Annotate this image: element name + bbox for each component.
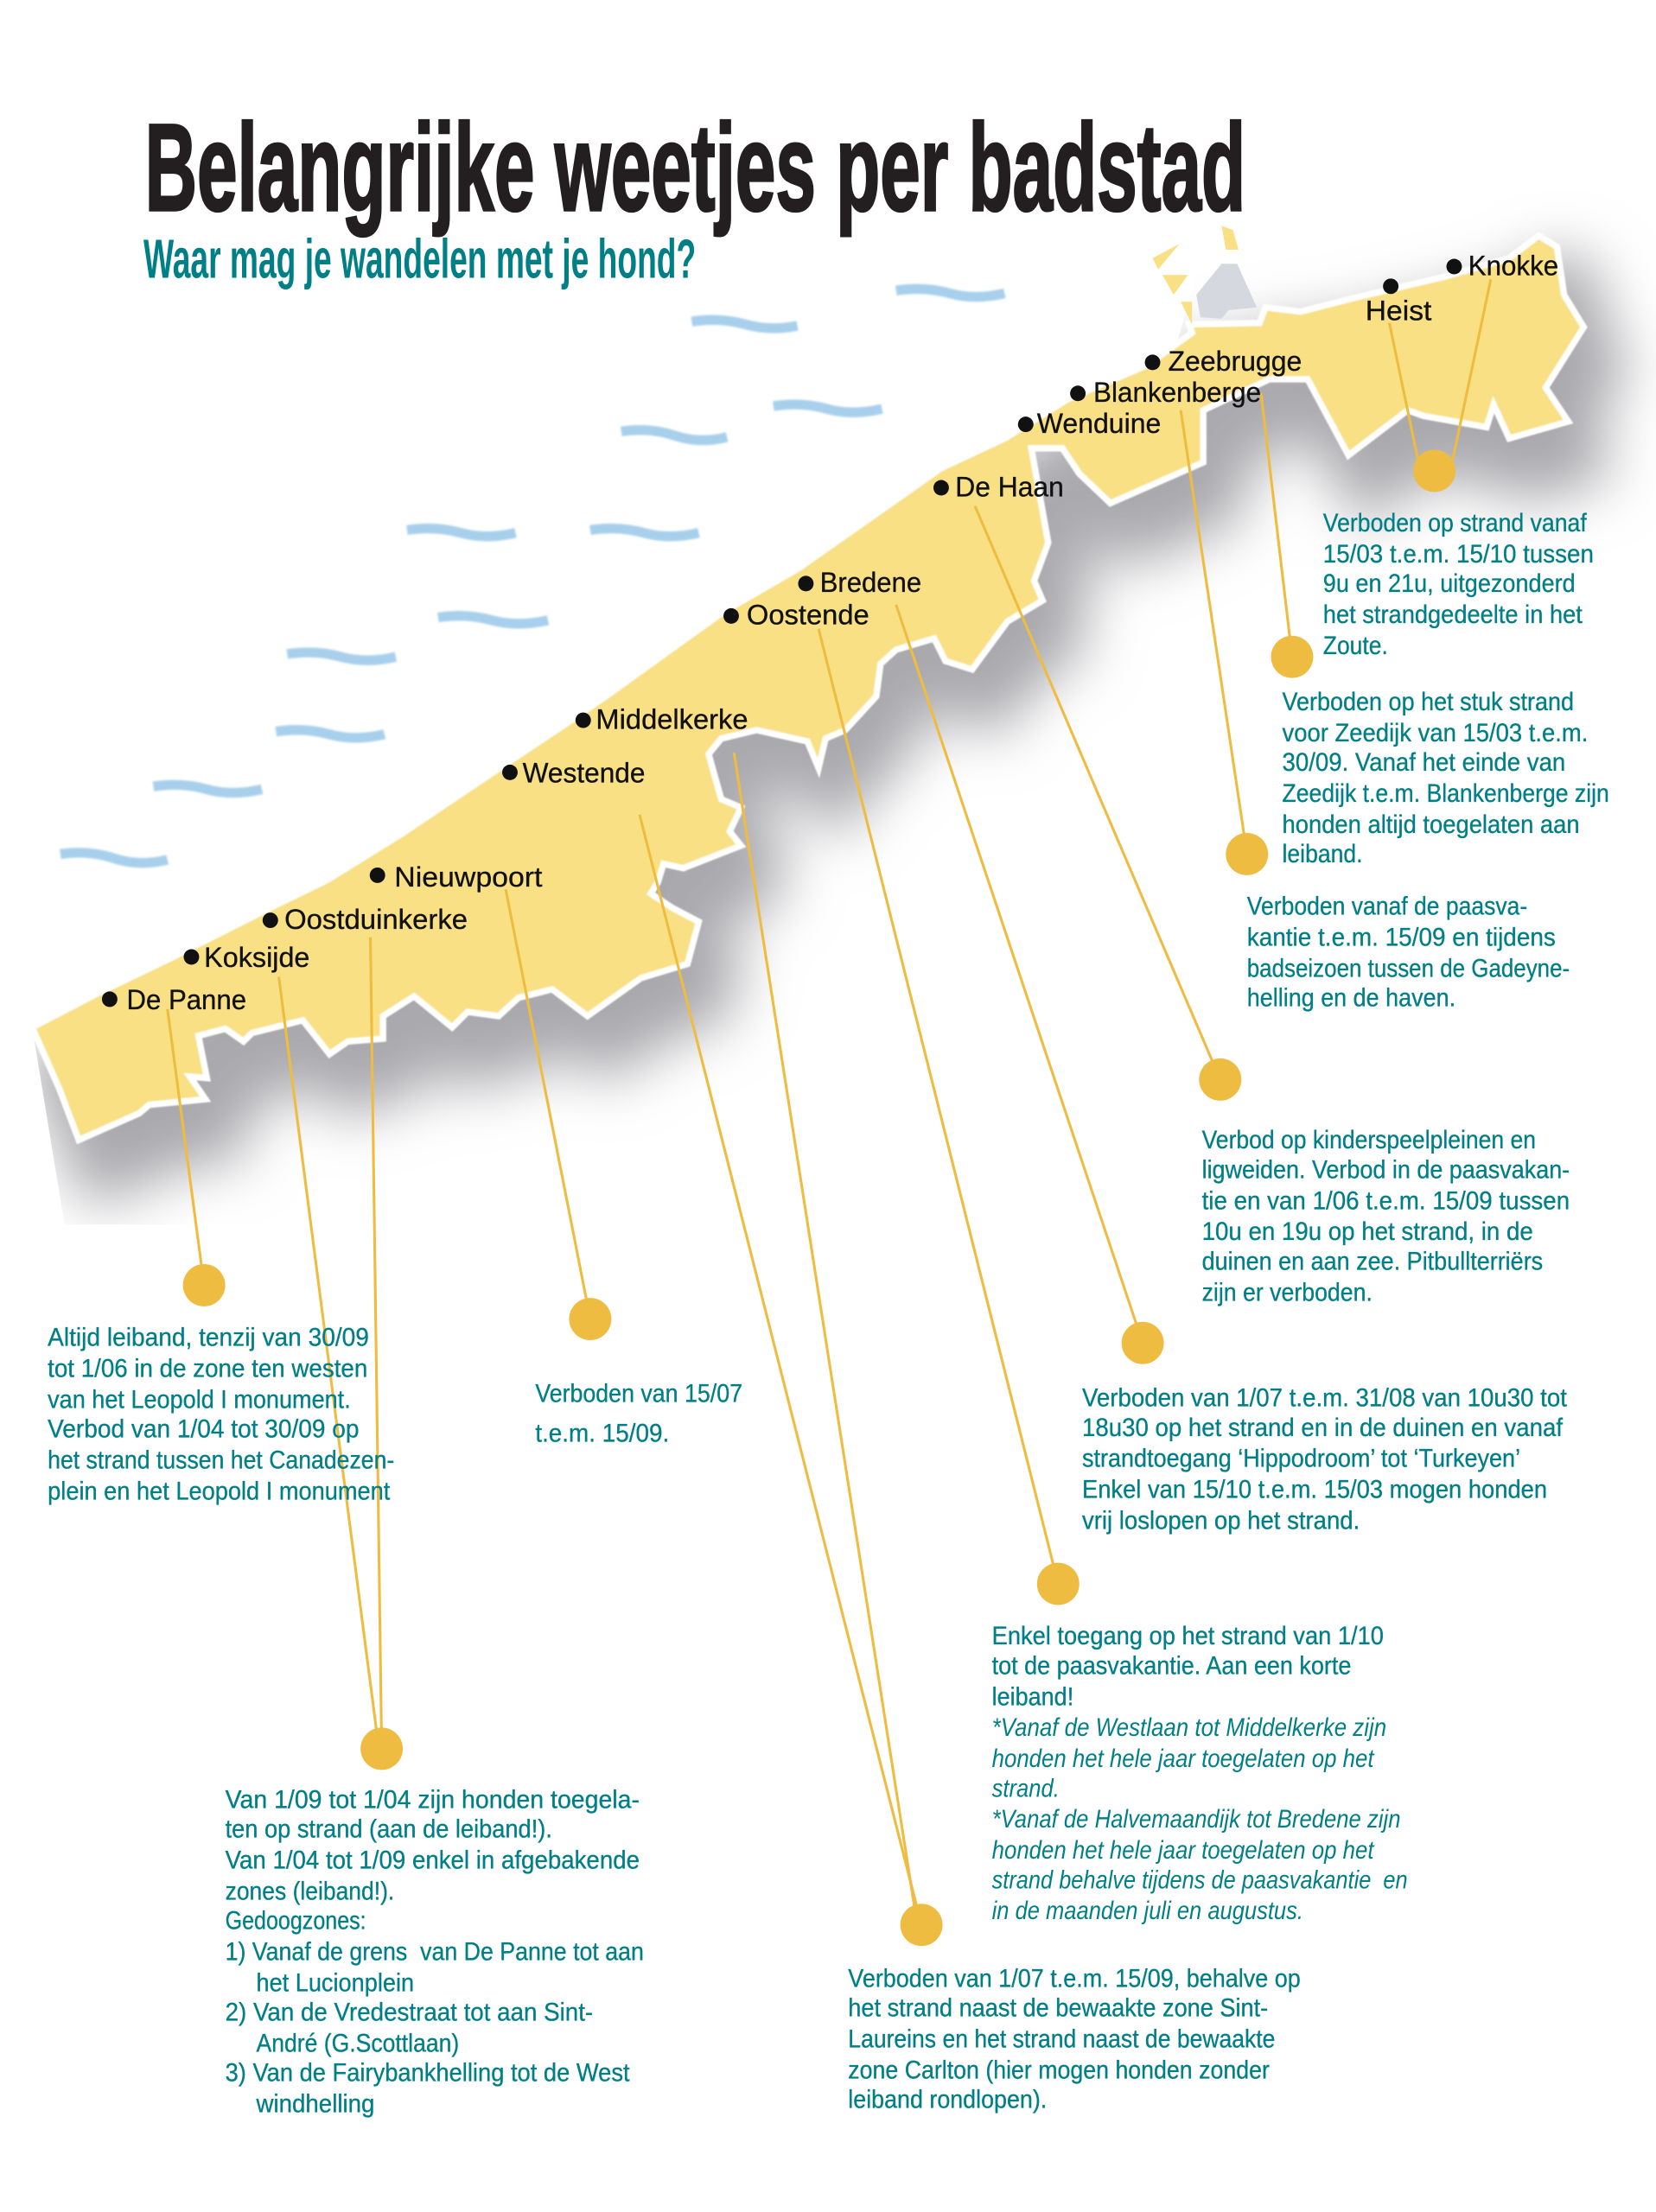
town labels: Nieuwpoort (394, 861, 542, 893)
text: Bredene (1082, 1384, 1567, 1535)
text: Bredene: Enkel van 15/10 t.e.m. 15/03 mogen honden (1082, 1476, 1547, 1504)
text: Koksijde and Oostduinkerke: Van 1/09 tot 1/04 zijn honden toegela- (226, 1785, 640, 1814)
text: Nieuwpoort: t.e.m. 15/09. (535, 1419, 669, 1447)
text: De Panne: Altijd leiband, tenzij van 30/09 (48, 1324, 369, 1352)
text: Koksijde and Oostduinkerke: 1) Vanaf de grens van De Panne tot aan (226, 1937, 644, 1966)
text: Knokke-Heist: Zoute. (1323, 632, 1388, 660)
text: Knokke-Heist: Verboden op strand vanaf (1323, 509, 1588, 537)
text: Oostende: in de maanden juli en augustus. (992, 1897, 1303, 1925)
land shape (32, 236, 1583, 1140)
harbour of Zeebrugge (1153, 226, 1257, 324)
text: Blankenberge: kantie t.e.m. 15/09 en tijdens (1247, 923, 1556, 951)
text: Oostende: honden het hele jaar toegelaten op het (992, 1745, 1375, 1773)
text: Koksijde and Oostduinkerke: Gedoogzones: (226, 1907, 366, 1936)
text: De Panne: het strand tussen het Canadezen- (48, 1446, 394, 1474)
text: Nieuwpoort: Verboden van 15/07 (535, 1380, 742, 1408)
text: Knokke-Heist: het strandgedeelte in het (1323, 601, 1583, 629)
text: Bredene: vrij loslopen op het strand. (1082, 1506, 1360, 1535)
text: Koksijde and Oostduinkerke: André (G.Scottlaan) (256, 2029, 459, 2057)
text: Blankenberge (1247, 893, 1570, 1013)
town labels: Oostende (747, 599, 869, 631)
text: De Panne: Verbod van 1/04 tot 30/09 op (48, 1415, 360, 1444)
text: Middelkerke and Westende: Laureins en het strand naast de bewaakte (848, 2025, 1275, 2054)
text: Blankenberge: helling en de haven. (1247, 984, 1455, 1013)
text: De Haan: tie en van 1/06 t.e.m. 15/09 tussen (1202, 1186, 1570, 1215)
connector lines (168, 279, 1491, 1925)
sea waves (61, 289, 1004, 863)
town labels: Oostduinkerke (284, 903, 468, 935)
text: Knokke-Heist: 9u en 21u, uitgezonderd (1323, 569, 1576, 598)
text: De Haan: zijn er verboden. (1202, 1278, 1373, 1306)
town labels: Westende (523, 756, 646, 788)
text: Koksijde and Oostduinkerke: windhelling (256, 2090, 374, 2119)
text: Middelkerke and Westende: het strand naast de bewaakte zone Sint- (848, 1994, 1268, 2023)
text: Zeebrugge (1283, 688, 1609, 868)
text: Knokke-Heist (1323, 509, 1594, 660)
text: Oostende: strand behalve tijdens de paasvakantie en (992, 1866, 1408, 1894)
text: De Haan: duinen en aan zee. Pitbullterriërs (1202, 1247, 1543, 1275)
town labels: Blankenberge (1093, 376, 1261, 408)
town labels: Koksijde (204, 941, 309, 973)
town labels (102, 249, 1558, 1015)
subtitle: Waar mag je wandelen met je hond? (143, 229, 696, 290)
text: Koksijde and Oostduinkerke (226, 1785, 644, 2119)
text: Oostende: leiband! (992, 1682, 1073, 1711)
text: Zeebrugge: honden altijd toegelaten aan (1283, 810, 1580, 839)
text: Zeebrugge: Verboden op het stuk strand (1283, 688, 1574, 716)
text: De Panne: plein en het Leopold I monument (48, 1477, 390, 1505)
text: De Panne (48, 1324, 394, 1505)
text: Oostende: *Vanaf de Halvemaandijk tot Bredene zijn (992, 1805, 1401, 1834)
town labels: Knokke (1468, 249, 1558, 281)
text: Nieuwpoort (535, 1380, 742, 1447)
text: Koksijde and Oostduinkerke: het Lucionplein (256, 1968, 414, 1997)
text: Oostende: *Vanaf de Westlaan tot Middelkerke zijn (992, 1713, 1386, 1742)
town labels: De Panne (126, 983, 246, 1015)
text: Middelkerke and Westende: leiband rondlopen). (848, 2086, 1047, 2114)
text: Koksijde and Oostduinkerke: zones (leiband!). (226, 1877, 394, 1905)
text: Oostende: strand. (992, 1774, 1060, 1802)
text: Oostende: honden het hele jaar toegelaten op het (992, 1836, 1375, 1865)
map: Belgian coast (32, 226, 1603, 1179)
text: Zeebrugge: voor Zeedijk van 15/03 t.e.m. (1283, 719, 1588, 747)
text: Koksijde and Oostduinkerke: 2) Van de Vredestraat tot aan Sint- (226, 1999, 593, 2027)
town labels: Zeebrugge (1168, 345, 1302, 377)
text: Zeebrugge: leiband. (1283, 840, 1362, 868)
text: Blankenberge: Verboden vanaf de paasva- (1247, 893, 1527, 921)
text: Bredene: strandtoegang ‘Hippodroom’ tot ‘Turkeyen’ (1082, 1445, 1520, 1473)
text: Oostende: tot de paasvakantie. Aan een korte (992, 1651, 1351, 1680)
town labels: De Haan (955, 470, 1064, 502)
yellow callout dots (183, 449, 1455, 1946)
map drop shadow (52, 275, 1603, 1179)
text: Middelkerke and Westende: zone Carlton (hier mogen honden zonder (848, 2056, 1270, 2084)
text: De Panne: tot 1/06 in de zone ten westen (48, 1354, 367, 1382)
text: Bredene: Verboden van 1/07 t.e.m. 31/08 van 10u30 tot (1082, 1384, 1567, 1413)
town labels: Wenduine (1037, 407, 1161, 439)
town labels: Heist (1366, 294, 1431, 326)
text: Koksijde and Oostduinkerke: ten op strand (aan de leiband!). (226, 1815, 552, 1844)
text: Koksijde and Oostduinkerke: 3) Van de Fairybankhelling tot de West (226, 2059, 630, 2088)
text: Bredene: 18u30 op het strand en in de duinen en vanaf (1082, 1414, 1564, 1442)
text: De Panne: van het Leopold I monument. (48, 1385, 351, 1414)
text: Zeebrugge: 30/09. Vanaf het einde van (1283, 748, 1565, 777)
text: Knokke-Heist: 15/03 t.e.m. 15/10 tussen (1323, 540, 1594, 569)
text: De Haan: 10u en 19u op het strand, in de (1202, 1217, 1533, 1246)
text: De Haan (1202, 1126, 1570, 1306)
text: Middelkerke and Westende (848, 1964, 1301, 2114)
town labels: Bredene (820, 566, 921, 598)
text: Oostende (992, 1622, 1408, 1925)
text: De Haan: ligweiden. Verbod in de paasvakan- (1202, 1155, 1570, 1184)
text: De Haan: Verbod op kinderspeelpleinen en (1202, 1126, 1536, 1154)
text: Blankenberge: badseizoen tussen de Gadeyne- (1247, 954, 1570, 982)
text: Oostende: Enkel toegang op het strand van 1/10 (992, 1622, 1384, 1650)
text: Middelkerke and Westende: Verboden van 1/07 t.e.m. 15/09, behalve op (848, 1964, 1301, 1993)
town labels: Middelkerke (596, 702, 748, 734)
text: Zeebrugge: Zeedijk t.e.m. Blankenberge zijn (1283, 779, 1609, 808)
text: Koksijde and Oostduinkerke: Van 1/04 tot 1/09 enkel in afgebakende (226, 1846, 640, 1874)
